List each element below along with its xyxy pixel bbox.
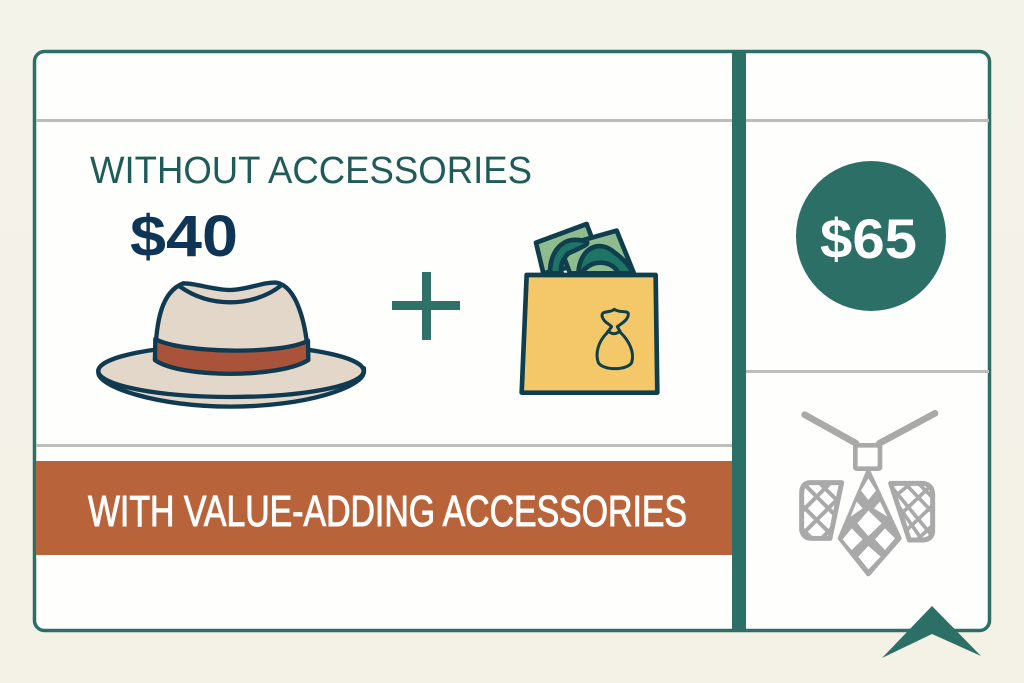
heading: without accessories: WITHOUT ACCESSORIES — [90, 150, 532, 192]
icon: plus sign — [392, 272, 460, 340]
price: $40: $40 — [130, 204, 238, 269]
arrow: up chevron — [882, 606, 981, 658]
icon: hat — [98, 283, 364, 407]
banner: with value-adding accessories: WITH VALUE-ADDING ACCESSORIES — [88, 487, 687, 536]
banner: with value-adding accessories — [36, 461, 732, 555]
vertical divider bar — [732, 51, 746, 631]
icon: shopping bag with money — [522, 224, 657, 393]
badge: $65: $65 — [820, 207, 917, 270]
panel: main card — [34, 52, 990, 630]
badge: $65 — [796, 161, 946, 311]
icon: necktie and pockets — [797, 413, 937, 574]
